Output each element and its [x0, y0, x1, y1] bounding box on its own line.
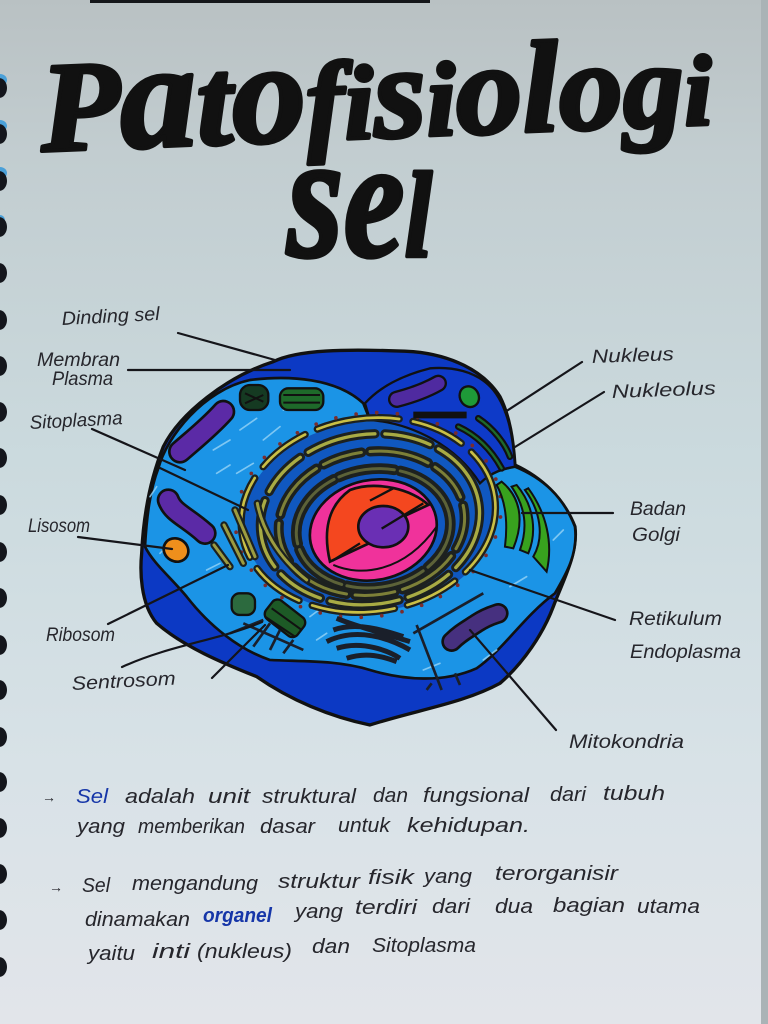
label: Nukleolus: Nukleolus	[611, 378, 717, 403]
line 1: struktural	[262, 786, 357, 808]
line 2 start: dinamakan	[85, 909, 190, 931]
label: Nukleus: Nukleus	[591, 344, 675, 368]
label: Sentrosom: Sentrosom	[71, 669, 176, 695]
cell body	[141, 350, 575, 725]
label: Dinding sel: Dinding sel	[61, 304, 161, 330]
perinuclear region	[234, 409, 506, 624]
line 2: yang	[75, 816, 125, 838]
nucleolus	[358, 506, 408, 547]
nucleus membrane	[300, 468, 446, 592]
label: Ribosom: Ribosom	[46, 625, 115, 646]
centrosome and dark organelles	[232, 385, 467, 640]
line 2 end: dua	[495, 896, 533, 918]
green vesicle	[456, 383, 483, 411]
line 2: untuk	[338, 815, 391, 837]
nucleus pointer lines	[333, 488, 423, 561]
line 1: terorganisir	[495, 863, 620, 885]
line 2 end: dari	[432, 896, 471, 918]
leader lines	[78, 333, 615, 730]
line 2 end: bagian	[553, 895, 625, 917]
line 1: fisik	[368, 867, 415, 889]
spiral binding holes	[0, 74, 7, 977]
line 3: Sitoplasma	[372, 935, 476, 957]
mitochondrion bottom right	[452, 613, 498, 642]
nucleus inner arc	[333, 527, 437, 571]
line 2: memberikan	[138, 816, 245, 838]
organelle stripes	[245, 393, 320, 637]
mitochondrion top right	[397, 383, 438, 399]
line 1: dari	[550, 784, 587, 806]
ribosome dots	[222, 396, 514, 634]
bullet arrow 2: →	[49, 879, 63, 895]
line 2 end: yang	[293, 901, 343, 923]
line 3: yaitu	[86, 943, 135, 965]
cytoplasm	[145, 378, 576, 679]
top right dark region	[365, 368, 515, 483]
nucleus	[300, 468, 446, 592]
upper right stacked membranes	[458, 418, 510, 468]
right page edge	[761, 0, 768, 1024]
line 1: tubuh	[603, 783, 665, 805]
title: Patofisiologi: Patofisiologi	[36, 0, 715, 184]
line 3: (nukleus)	[197, 941, 292, 963]
line 1: struktur	[278, 871, 362, 893]
cytoplasm white hatching	[150, 402, 563, 670]
top dark edge	[90, 0, 430, 3]
line 2: dasar	[260, 816, 316, 838]
endoplasmic reticulum	[222, 396, 514, 634]
label: Badan Golgi: Golgi	[632, 525, 681, 546]
paragraph 2	[49, 863, 700, 965]
bullet arrow 1: →	[42, 789, 56, 805]
line 1: unit	[208, 786, 252, 808]
line 1: fungsional	[423, 785, 530, 807]
line 1: Sel	[82, 875, 111, 897]
line 3: dan	[312, 936, 350, 958]
paragraph 1	[42, 783, 665, 838]
mitochondrion left	[168, 500, 205, 533]
line 1: dan	[373, 785, 408, 807]
line 3: inti	[152, 941, 191, 963]
microtubule and vesicle lines	[230, 593, 483, 690]
keyword: organel: organel	[203, 905, 272, 927]
line 2 end: utama	[637, 896, 700, 918]
label: Badan Golgi: Badan	[630, 499, 686, 520]
nucleus orange part	[327, 486, 428, 562]
lysosome	[159, 534, 193, 566]
label: Mitokondria: Mitokondria	[569, 732, 684, 753]
cell part labels	[28, 304, 741, 753]
golgi body	[497, 482, 549, 572]
line 1: mengandung	[132, 873, 258, 895]
label: Membran Plasma: Membran	[37, 350, 120, 371]
left ER bars	[214, 503, 307, 580]
cell diagram	[141, 350, 576, 725]
line 1: adalah	[125, 786, 195, 808]
label: Retikulum Endoplasma: Retikulum	[629, 609, 722, 630]
line 1: yang	[422, 866, 472, 888]
label: Membran Plasma: Plasma	[52, 369, 113, 390]
keyword: Sel: Sel	[76, 786, 109, 808]
title: sel: sel	[286, 96, 432, 295]
line 2: kehidupan.	[407, 815, 530, 837]
label: Retikulum Endoplasma: Endoplasma	[630, 642, 741, 663]
label: Sitoplasma: Sitoplasma	[29, 408, 123, 434]
mitochondrion top left	[180, 412, 223, 452]
label: Lisosom: Lisosom	[28, 516, 90, 537]
line 2 end: terdiri	[355, 897, 418, 919]
